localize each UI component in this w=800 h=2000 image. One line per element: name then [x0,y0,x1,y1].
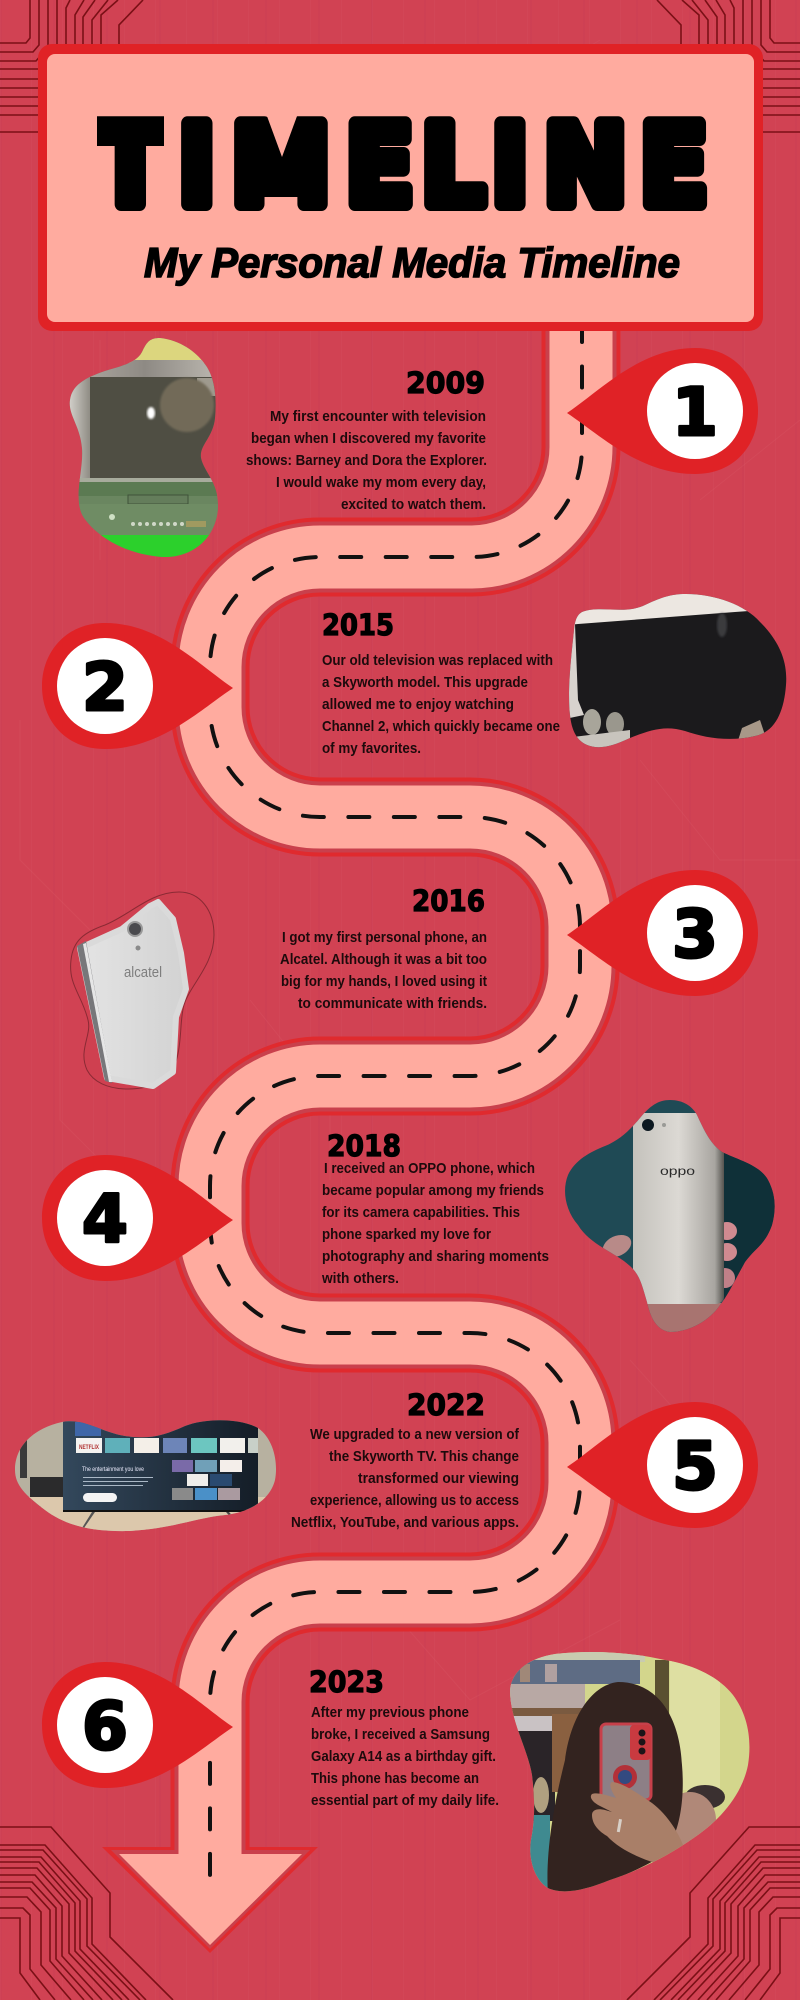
text 2023: essential part of my daily life. [311,1792,499,1809]
text 2015: of my favorites. [322,740,421,757]
pin 5: 5 [672,1428,718,1505]
photo 3: Alcatel phone: alcatel [124,964,162,981]
circuit lines: bottom-left corner [0,1827,173,2000]
text 2022: transformed our viewing [358,1470,519,1487]
text 2018: for its camera capabilities. This [322,1204,520,1221]
photo 4: OPPO phone [565,1100,775,1332]
photo 5: new Skyworth smart TV [15,1420,276,1532]
pin 1 [567,348,758,474]
text 2009: My first encounter with television [270,408,486,425]
header panel [38,44,763,331]
photo 6: selfie with Samsung phone [505,1650,755,1895]
year 2016: 2016 [412,884,485,918]
pin 5 [567,1402,758,1528]
subtitle: My Personal Media Timeline [144,239,680,286]
pin 2: 2 [82,649,128,726]
section 2022 [291,1388,520,1531]
pin 1: 1 [672,374,718,451]
text 2022 [291,1426,520,1531]
text 2022: the Skyworth TV. This change [329,1448,519,1465]
text 2015: Our old television was replaced with [322,652,553,669]
text 2009: I would wake my mom every day, [276,474,486,491]
pin 4: 4 [82,1181,128,1258]
year 2022: 2022 [407,1388,485,1422]
photo 3: Alcatel phone [71,892,214,1089]
text 2015: Channel 2, which quickly became one [322,718,560,735]
circuit lines: top-left corner [0,0,143,132]
pin 6: 6 [82,1688,128,1765]
text 2023: This phone has become an [311,1770,479,1787]
text 2018: became popular among my friends [322,1182,544,1199]
text 2016 [280,929,487,1012]
photo 2: Skyworth television [560,590,790,750]
pin 4 [42,1155,233,1281]
pin 3 [567,870,758,996]
text 2023: Galaxy A14 as a birthday gift. [311,1748,496,1765]
text 2022: We upgraded to a new version of [310,1426,520,1443]
section 2015 [322,608,560,757]
year 2009: 2009 [406,366,485,400]
year 2023: 2023 [309,1665,384,1699]
circuit lines: top-right corner [657,0,800,132]
text 2016: big for my hands, I loved using it [281,973,487,990]
photo 5: new Skyworth smart TV: The entertainment you love [82,1466,144,1473]
text 2016: Alcatel. Although it was a bit too [280,951,487,968]
title: TIMELINE [96,101,708,230]
text 2022: experience, allowing us to access [310,1492,519,1509]
text 2009: began when I discovered my favorite [251,430,486,447]
text 2009: shows: Barney and Dora the Explorer. [246,452,487,469]
pin 3: 3 [672,896,718,973]
year 2018: 2018 [327,1129,401,1163]
photo 1: old television [70,338,218,557]
text 2009: excited to watch them. [341,496,486,513]
winding road with arrow [102,300,582,1953]
text 2023: After my previous phone [311,1704,469,1721]
section 2016 [280,884,487,1012]
text 2015 [322,652,560,757]
section 2023 [309,1665,499,1809]
text 2018: phone sparked my love for [322,1226,491,1243]
pin 2 [42,623,233,749]
photo 4: OPPO phone: oppo [660,1164,695,1178]
section 2009 [246,366,487,513]
text 2015: allowed me to enjoy watching [322,696,514,713]
text 2018: photography and sharing moments [322,1248,549,1265]
section 2018 [321,1129,549,1287]
text 2018: with others. [321,1270,399,1287]
text 2015: a Skyworth model. This upgrade [322,674,528,691]
text 2018 [321,1160,549,1287]
photo 5: new Skyworth smart TV: NETFLIX [79,1445,99,1451]
text 2009 [246,408,487,513]
text 2023: broke, I received a Samsung [311,1726,490,1743]
pin 6 [42,1662,233,1788]
circuit lines: bottom-right corner [627,1827,800,2000]
year 2015: 2015 [322,608,394,642]
text 2023 [311,1704,499,1809]
text 2016: I got my first personal phone, an [282,929,487,946]
text 2022: Netflix, YouTube, and various apps. [291,1514,519,1531]
text 2018: I received an OPPO phone, which [324,1160,535,1177]
text 2016: to communicate with friends. [298,995,487,1012]
